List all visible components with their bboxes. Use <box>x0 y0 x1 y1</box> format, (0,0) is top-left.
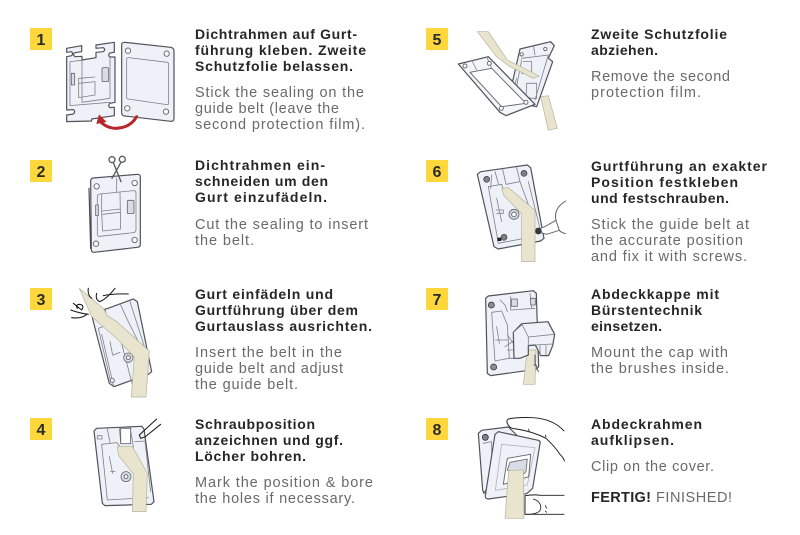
finished line: FERTIG! <box>591 490 651 506</box>
step 6 text: Position festkleben <box>591 174 738 190</box>
step 6 text: Stick the guide belt at <box>591 217 749 233</box>
step 5 text: Zweite Schutzfolie <box>591 26 727 42</box>
step 3 text: Gurtauslass ausrichten. <box>195 318 372 334</box>
step 3 text: Gurt einfädeln und <box>195 286 333 302</box>
step 7 panel <box>426 286 729 384</box>
step 1 text: führung kleben. Zweite <box>195 42 366 58</box>
step 2 text <box>195 157 368 249</box>
step 3 text: Insert the belt in the <box>195 345 342 361</box>
step 6 text: und festschrauben. <box>591 190 729 206</box>
step 1 text: Dichtrahmen auf Gurt- <box>195 26 357 42</box>
step 7 text: the brushes inside. <box>591 361 729 377</box>
step 1 text: Schutzfolie belassen. <box>195 58 353 74</box>
step 4 badge <box>30 418 52 440</box>
step 1 text: Stick the sealing on the <box>195 85 364 101</box>
hand bottom <box>525 495 564 514</box>
step 4 text <box>195 416 373 507</box>
step 6 panel <box>426 158 768 265</box>
belt <box>502 188 535 262</box>
step 3 text: the guide belt. <box>195 377 298 393</box>
brush cap <box>513 322 555 372</box>
step 5 text <box>591 26 730 101</box>
belt <box>477 32 539 78</box>
step 6 text: and fix it with screws. <box>591 249 747 265</box>
step 7 text: Mount the cap with <box>591 345 728 361</box>
step 8 text: aufklipsen. <box>591 432 674 448</box>
belt <box>79 288 149 397</box>
step 6 illustration: screwing the guide <box>477 165 566 262</box>
screwdriver and hand <box>541 201 566 234</box>
step 4 illustration: marking screw position <box>94 419 161 512</box>
step 4 panel <box>30 416 373 512</box>
step 7 badge <box>426 288 448 310</box>
step 2 text: Cut the sealing to insert <box>195 217 368 233</box>
step 3 text <box>195 286 372 393</box>
step 2 badge <box>30 160 52 182</box>
step 2 text: Dichtrahmen ein- <box>195 157 325 173</box>
hand top <box>507 417 564 461</box>
step 1 panel <box>30 26 366 133</box>
step 3 panel <box>30 286 372 397</box>
step 3 badge: 3 <box>37 292 46 309</box>
step 6 text: the accurate position <box>591 233 743 249</box>
step 3 illustration: threading the belt <box>71 288 152 397</box>
step 7 text: Abdeckkappe mit <box>591 286 719 302</box>
step 8 badge <box>426 418 448 440</box>
step 8 panel <box>426 416 732 518</box>
step 8 text <box>591 416 732 506</box>
step 1 text <box>195 26 366 133</box>
step 5 badge: 5 <box>433 32 442 49</box>
film sheet <box>458 57 535 116</box>
step 4 text: the holes if necessary. <box>195 491 355 507</box>
step 1 badge <box>30 28 52 50</box>
step 4 text: Löcher bohren. <box>195 448 306 464</box>
belt lower part <box>523 350 536 384</box>
step 8 text: Clip on the cover. <box>591 459 714 475</box>
finished line: FINISHED! <box>656 490 732 506</box>
step 7 text: Bürstentechnik <box>591 302 702 318</box>
step 3 text: Gurtführung über dem <box>195 302 358 318</box>
step 2 text: Gurt einzufädeln. <box>195 189 327 205</box>
step 5 text: Remove the second <box>591 69 730 85</box>
screws <box>484 170 541 241</box>
step 4 text: Schraubposition <box>195 416 315 432</box>
step 8 text: Abdeckrahmen <box>591 416 702 432</box>
pen <box>139 419 161 438</box>
step 2 badge: 2 <box>37 164 46 181</box>
step 5 badge <box>426 28 448 50</box>
step 4 badge: 4 <box>37 422 46 439</box>
step 8 illustration: clipping on the cover <box>478 417 564 518</box>
icon: scissors <box>109 156 125 182</box>
step 7 badge: 7 <box>433 292 442 309</box>
step 7 text <box>591 286 729 377</box>
step 4 text: Mark the position & bore <box>195 475 373 491</box>
step 1 text: second protection film). <box>195 117 365 133</box>
step 5 text: abziehen. <box>591 42 658 58</box>
step 2 text: schneiden um den <box>195 173 328 189</box>
step 8 badge: 8 <box>433 422 442 439</box>
step 3 badge <box>30 288 52 310</box>
step 7 text: einsetzen. <box>591 318 662 334</box>
step 1 illustration: sealing frame and guide <box>67 42 174 128</box>
belt <box>505 470 524 518</box>
step 2 panel <box>30 156 368 252</box>
hand <box>71 288 128 318</box>
belt <box>117 446 147 512</box>
step 6 badge: 6 <box>433 164 442 181</box>
step 6 text <box>591 158 768 265</box>
step 5 text: protection film. <box>591 85 701 101</box>
step 5 panel <box>426 26 730 130</box>
red arrow <box>96 114 137 128</box>
finished line <box>591 490 732 506</box>
step 2 illustration: frame and scissors <box>89 156 140 252</box>
step 3 text: guide belt and adjust <box>195 361 343 377</box>
step 2 text: the belt. <box>195 233 254 249</box>
step 7 illustration: mounting the cap <box>486 291 555 384</box>
step 4 text: anzeichnen und ggf. <box>195 432 343 448</box>
step 6 text: Gurtführung an exakter <box>591 158 768 174</box>
step 6 badge <box>426 160 448 182</box>
step 5 illustration: removing protection film <box>458 32 557 130</box>
step 1 badge: 1 <box>37 32 46 49</box>
step 1 text: guide belt (leave the <box>195 101 339 117</box>
